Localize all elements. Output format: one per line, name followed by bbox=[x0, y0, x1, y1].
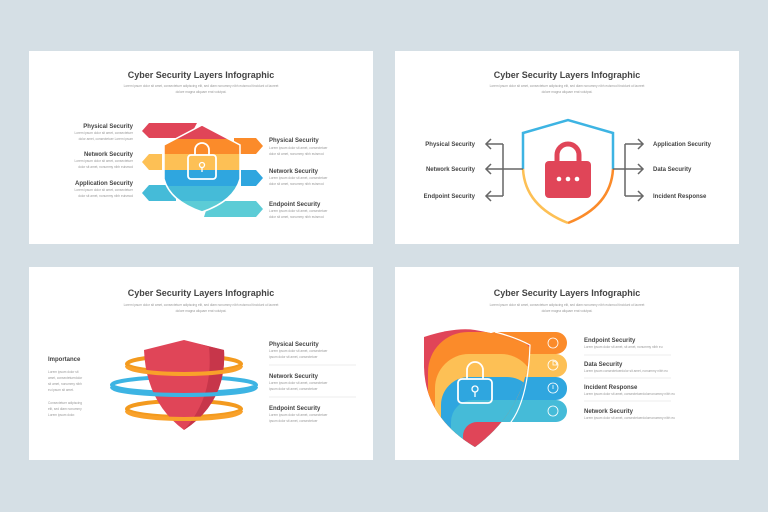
subtitle bbox=[124, 303, 279, 313]
subtitle: Lorem ipsum dolor sit amet, consectetuer adipiscing elit, sed diam nonummy nibh euismod tincidunt ut laoreet bbox=[490, 303, 645, 307]
right labels: dolor sit amet, nonummy nibh euismod bbox=[269, 182, 324, 186]
right labels: Lorem ipsum dolor sit amet, consectetuerdolornonummy nibh eu bbox=[584, 416, 675, 420]
left labels: Application Security bbox=[75, 181, 134, 187]
right labels: ipsum dolor sit amet, consectetuer bbox=[269, 419, 318, 423]
right labels: Lorem ipsum dolor sit amet, consectetuer bbox=[269, 413, 328, 417]
subtitle: Lorem ipsum dolor sit amet, consectetuer adipiscing elit, sed diam nonummy nibh euismod tincidunt ut laoreet bbox=[124, 84, 279, 88]
left labels: Physical Security bbox=[425, 142, 476, 148]
right labels: dolor sit amet, nonummy nibh euismod bbox=[269, 215, 324, 219]
importance text: elit, sed diam nonummy bbox=[48, 407, 82, 411]
panel: slide 1 layered shield bbox=[29, 51, 373, 244]
banded shield bbox=[424, 329, 567, 447]
subtitle bbox=[124, 84, 279, 94]
left labels: Physical Security bbox=[83, 124, 134, 130]
right labels: Incident Response bbox=[584, 385, 638, 391]
right labels: Endpoint Security bbox=[269, 406, 321, 412]
right labels: Physical Security bbox=[269, 342, 319, 348]
subtitle bbox=[490, 303, 645, 313]
shield outline bbox=[523, 120, 613, 223]
subtitle: Lorem ipsum dolor sit amet, consectetuer adipiscing elit, sed diam nonummy nibh euismod tincidunt ut laoreet bbox=[490, 84, 645, 88]
panel: slide 3 shield with rings bbox=[29, 267, 373, 460]
title: Cyber Security Layers Infographic bbox=[128, 288, 274, 298]
subtitle: dolore magna aliquam erat volutpat. bbox=[176, 309, 227, 313]
shield with rings bbox=[112, 340, 256, 430]
left labels bbox=[424, 142, 476, 200]
right labels: Lorem ipsum dolor sit amet, consectetuer bbox=[269, 146, 328, 150]
subtitle: dolore magna aliquam erat volutpat. bbox=[542, 90, 593, 94]
left labels: Network Security bbox=[426, 167, 476, 173]
importance text: Importance bbox=[48, 357, 81, 363]
right labels: Lorem ipsum dolor sit amet, sit amet, nonummy nibh eu bbox=[584, 345, 663, 349]
arrow tabs bbox=[142, 123, 263, 217]
panel: slide 4 banded shield bbox=[395, 267, 739, 460]
right labels bbox=[584, 338, 675, 420]
right labels: Lorem ipsum dolor sit amet, consectetuer bbox=[269, 209, 328, 213]
importance text: Lorem ipsum dolor sit bbox=[48, 370, 79, 374]
right labels: ipsum dolor sit amet, consectetuer bbox=[269, 387, 318, 391]
subtitle: dolore magna aliquam erat volutpat. bbox=[542, 309, 593, 313]
right labels: Network Security bbox=[269, 169, 319, 175]
left labels bbox=[75, 124, 134, 198]
right labels: Lorem ipsum consectetuerdolor sit amet, nonummy nibh eu bbox=[584, 369, 668, 373]
arrows right bbox=[613, 139, 643, 201]
left labels: Lorem ipsum dolor sit amet, consectetuer bbox=[75, 131, 134, 135]
left labels: dolor sit amet, nonummy nibh euismod bbox=[78, 194, 133, 198]
importance text: Lorem ipsum dolor. bbox=[48, 413, 75, 417]
left labels: Network Security bbox=[84, 152, 134, 158]
right labels: Data Security bbox=[584, 362, 623, 368]
right labels: Application Security bbox=[653, 142, 712, 148]
left labels: Endpoint Security bbox=[424, 194, 476, 200]
title: Cyber Security Layers Infographic bbox=[494, 70, 640, 80]
right labels: Network Security bbox=[584, 409, 634, 415]
subtitle: dolore magna aliquam erat volutpat. bbox=[176, 90, 227, 94]
arrows left bbox=[486, 139, 523, 201]
importance text bbox=[48, 357, 83, 417]
left labels: dolor sit amet, nonummy nibh euismod bbox=[78, 165, 133, 169]
right labels bbox=[269, 138, 328, 219]
right labels: Network Security bbox=[269, 374, 319, 380]
right labels: Physical Security bbox=[269, 138, 319, 144]
right labels: Endpoint Security bbox=[269, 202, 321, 208]
importance text: sit amet, nonummy nibh bbox=[48, 382, 82, 386]
title: Cyber Security Layers Infographic bbox=[128, 70, 274, 80]
panel: slide 2 shield with arrows bbox=[395, 51, 739, 244]
right labels: Lorem ipsum dolor sit amet, consectetuer bbox=[269, 176, 328, 180]
right labels bbox=[269, 342, 356, 423]
right labels: Incident Response bbox=[653, 194, 707, 200]
right labels: dolor sit amet, nonummy nibh euismod bbox=[269, 152, 324, 156]
shield with stripes and lock bbox=[164, 126, 241, 212]
importance text: eu ipsum sit amet. bbox=[48, 388, 74, 392]
subtitle: Lorem ipsum dolor sit amet, consectetuer adipiscing elit, sed diam nonummy nibh euismod tincidunt ut laoreet bbox=[124, 303, 279, 307]
left labels: dolor amet, consectetuer Lorem ipsum bbox=[79, 137, 133, 141]
right labels: Lorem ipsum dolor sit amet, consectetuer bbox=[269, 381, 328, 385]
title: Cyber Security Layers Infographic bbox=[494, 288, 640, 298]
right labels: Lorem ipsum dolor sit amet, consectetuerdolornonummy nibh eu bbox=[584, 392, 675, 396]
importance text: Consectetuer adipiscing bbox=[48, 401, 82, 405]
right labels: ipsum dolor sit amet, consectetuer bbox=[269, 355, 318, 359]
subtitle bbox=[490, 84, 645, 94]
right labels: Data Security bbox=[653, 167, 692, 173]
importance text: amet, consectetuerdolor bbox=[48, 376, 83, 380]
right labels: Lorem ipsum dolor sit amet, consectetuer bbox=[269, 349, 328, 353]
left labels: Lorem ipsum dolor sit amet, consectetuer bbox=[75, 188, 134, 192]
lock icon bbox=[545, 144, 591, 198]
right labels bbox=[653, 142, 712, 200]
right labels: Endpoint Security bbox=[584, 338, 636, 344]
left labels: Lorem ipsum dolor sit amet, consectetuer bbox=[75, 159, 134, 163]
